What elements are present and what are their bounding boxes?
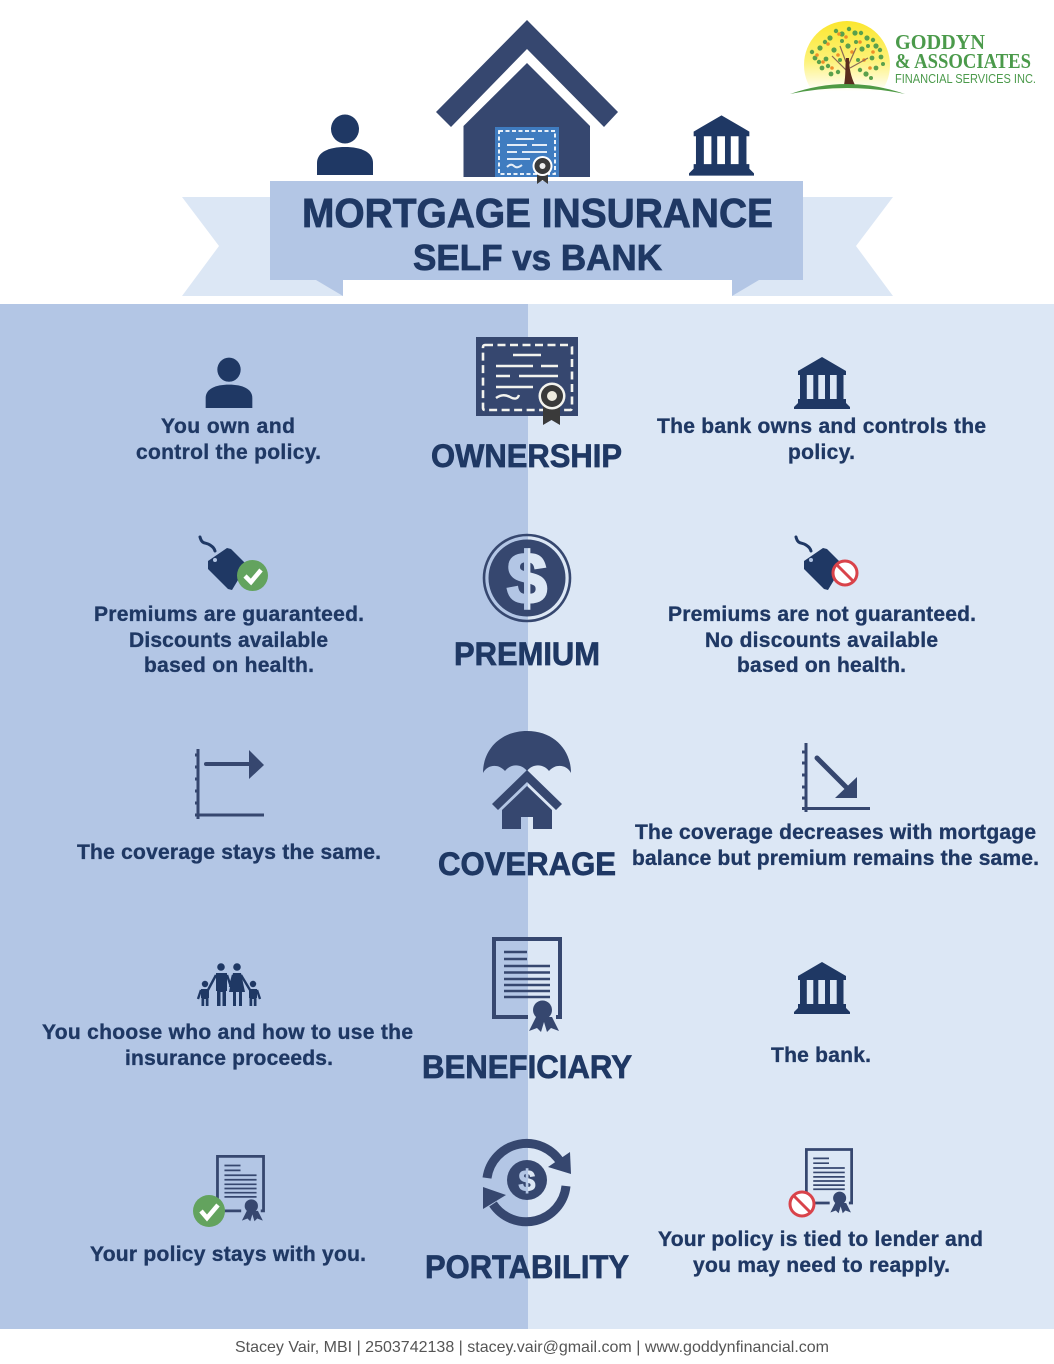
- text: premiums not guaranteed: based on health.: [737, 654, 906, 677]
- text: you choose: You choose who and how to use the: [42, 1021, 413, 1044]
- text: bank owns and controls: [657, 415, 986, 464]
- icon: document with prohibition: [790, 1149, 852, 1216]
- icon: umbrella over house: [483, 731, 571, 829]
- row: ownership: [136, 337, 986, 474]
- row: beneficiary: [42, 939, 871, 1085]
- heading: premium: PREMIUM: [454, 636, 600, 672]
- text: bank owns and controls: policy.: [788, 441, 855, 464]
- text: premiums guaranteed: [94, 603, 364, 677]
- row: coverage: [77, 731, 1039, 882]
- text: policy stays: Your policy stays with you.: [90, 1243, 366, 1266]
- text: coverage decreases: [632, 821, 1039, 870]
- text: you own and control: [136, 415, 321, 464]
- icon: header person: [317, 114, 373, 175]
- icon: tag with check: [200, 537, 268, 591]
- text: coverage decreases: balance but premium remains the same.: [632, 847, 1039, 870]
- icon: flat arrow chart: [195, 749, 264, 819]
- title: MORTGAGE INSURANCE: [302, 190, 773, 236]
- footer contact line: Stacey Vair, MBI | 2503742138 | stacey.vair@gmail.com | www.goddynfinancial.com: [235, 1339, 829, 1356]
- icon: circular dollar arrows: $: [519, 1165, 536, 1198]
- text: premiums guaranteed: based on health.: [144, 654, 314, 677]
- icon: circular dollar arrows: [483, 1143, 571, 1222]
- icon: tag with prohibition: [796, 537, 857, 590]
- text: coverage decreases: The coverage decreases with mortgage: [635, 821, 1036, 844]
- icon: bank: [794, 357, 850, 409]
- text: policy tied to lender: you may need to reapply.: [693, 1254, 950, 1277]
- logo: Goddyn & Associates: [790, 21, 1036, 109]
- title: SELF vs BANK: [413, 237, 662, 278]
- text: coverage stays: The coverage stays the same.: [77, 841, 381, 864]
- icon: document with check: [193, 1156, 264, 1227]
- icon: policy document: [494, 939, 560, 1032]
- text: premiums not guaranteed: Premiums are not guaranteed.: [668, 603, 976, 626]
- heading: portability: PORTABILITY: [425, 1249, 629, 1285]
- icon: dollar coin: [484, 535, 570, 621]
- text: bank owns and controls: The bank owns and controls the: [657, 415, 986, 438]
- text: premiums not guaranteed: No discounts available: [705, 629, 938, 652]
- row: portability: [90, 1143, 983, 1285]
- text: policy tied to lender: [658, 1228, 983, 1277]
- row: premium: [94, 535, 976, 677]
- icon: person: [206, 358, 252, 408]
- logo: Goddyn & Associates: GODDYN: [895, 30, 985, 54]
- icon: certificate: [476, 337, 578, 425]
- text: you own and control: control the policy.: [136, 441, 321, 464]
- text: policy tied to lender: Your policy is tied to lender and: [658, 1228, 983, 1251]
- text: you own and control: You own and: [161, 415, 295, 438]
- heading: coverage: COVERAGE: [438, 846, 616, 882]
- text: premiums guaranteed: Premiums are guaranteed.: [94, 603, 364, 626]
- icon: header house with certificate: [436, 20, 618, 184]
- text: you choose: insurance proceeds.: [125, 1047, 333, 1070]
- panel: bank (right column): [528, 304, 1054, 1329]
- heading: ownership: OWNERSHIP: [431, 438, 622, 474]
- icon: bank: [794, 962, 850, 1014]
- text: premiums not guaranteed: [668, 603, 976, 677]
- logo: Goddyn & Associates: FINANCIAL SERVICES INC.: [895, 72, 1036, 86]
- text: you choose: [42, 1021, 413, 1070]
- ribbon banner: [182, 181, 893, 296]
- heading: beneficiary: BENEFICIARY: [422, 1049, 632, 1085]
- panel: self (left column): [0, 304, 528, 1329]
- title: [302, 190, 773, 278]
- text: premiums guaranteed: Discounts available: [129, 629, 328, 652]
- icon: header bank: [689, 115, 754, 176]
- logo: Goddyn & Associates: & ASSOCIATES: [895, 49, 1031, 73]
- icon: decreasing arrow chart: [802, 743, 870, 812]
- icon: dollar coin: $: [507, 539, 547, 619]
- icon: family: [198, 963, 260, 1006]
- text: the bank: The bank.: [771, 1044, 871, 1067]
